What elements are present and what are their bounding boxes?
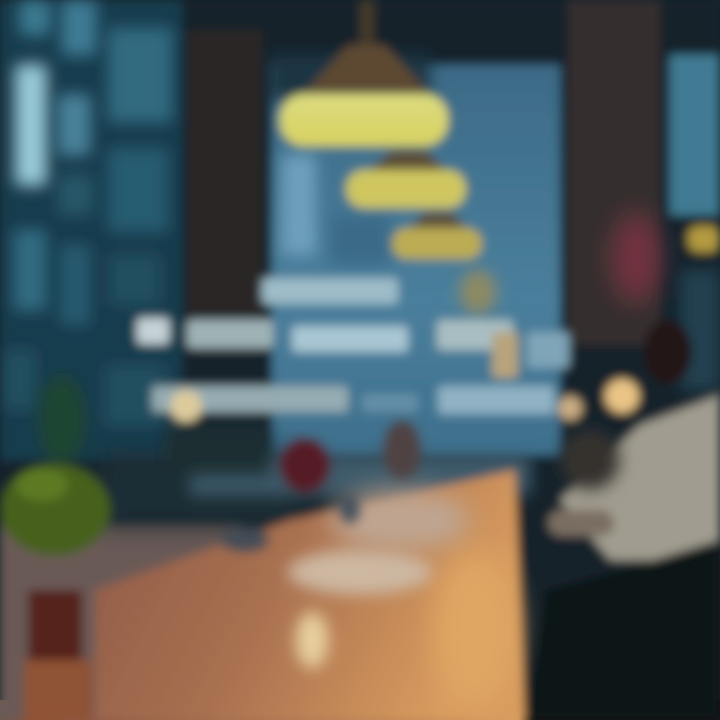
table items and guests (165, 420, 421, 552)
plant and pot (0, 375, 110, 720)
blurred white band (137, 278, 569, 414)
pendant lamp: distant (460, 270, 496, 314)
right dark pillar (568, 0, 660, 345)
centre window (270, 55, 560, 455)
left dark pillar (188, 30, 262, 315)
right window (670, 55, 720, 390)
seated person (548, 320, 720, 560)
bottom edge colour strip (0, 700, 720, 720)
pendant lamp: large (280, 0, 448, 146)
glowing lights (170, 379, 639, 422)
floor (0, 455, 530, 720)
pendant lamp: right edge (688, 226, 720, 252)
pendant lamp: small (392, 212, 482, 259)
left windows (0, 0, 182, 460)
table top (95, 470, 525, 720)
dark armchair (525, 540, 720, 720)
table highlights (288, 490, 517, 710)
red wall accent (612, 213, 660, 303)
pendant lamp: medium (346, 150, 466, 208)
